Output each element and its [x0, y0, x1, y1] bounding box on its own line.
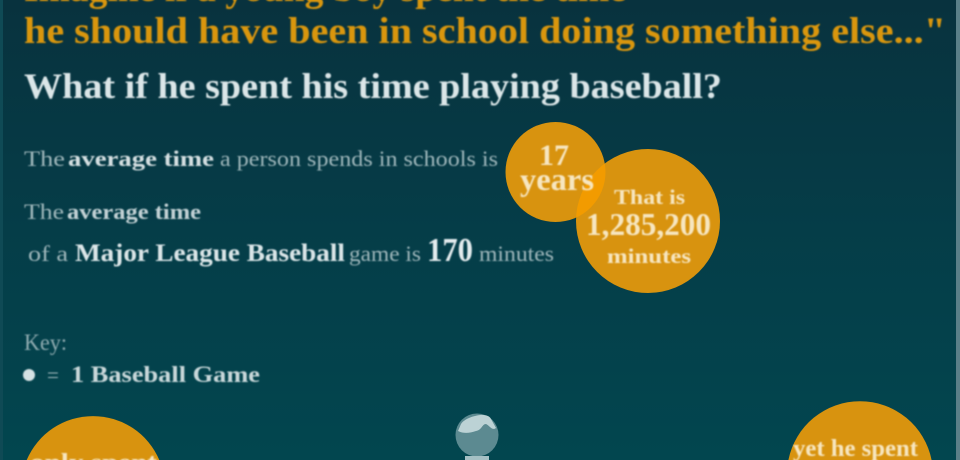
- text: average time in school: a person spends in schools is: [220, 146, 498, 171]
- text: average baseball game time: average time: [67, 199, 201, 224]
- figure: baseball player head: [456, 414, 498, 460]
- text: average time in school: The: [24, 146, 65, 171]
- icon: baseball game dot: [23, 369, 35, 381]
- circle label: that is 1,285,200 minutes: 1,285,200: [586, 206, 711, 242]
- question heading: What if he spent his time playing baseball?: [24, 66, 722, 106]
- circle label: that is 1,285,200 minutes: [586, 185, 711, 268]
- key: =: [47, 363, 59, 387]
- circle label: that is 1,285,200 minutes: minutes: [607, 244, 691, 268]
- text: average baseball game time: [24, 199, 554, 269]
- key: Key:: [24, 330, 67, 355]
- text: average baseball game time: minutes: [479, 241, 554, 266]
- text: average baseball game time: 170: [427, 232, 473, 269]
- text: average baseball game time: The: [24, 199, 64, 224]
- circle label: that is 1,285,200 minutes: That is: [614, 185, 685, 209]
- circle: bottom left: [27, 416, 159, 460]
- circle label: 17 years: [520, 139, 594, 197]
- text: average time in school: [24, 146, 498, 171]
- circle: bottom right: [788, 401, 932, 460]
- circle label: 17 years: 17: [539, 139, 569, 172]
- text: average time in school: average time: [68, 146, 214, 171]
- key: 1 Baseball Game: [71, 362, 260, 387]
- circle label: 17 years: years: [520, 161, 594, 197]
- text: average baseball game time: Major League Baseball: [75, 240, 345, 267]
- text: average baseball game time: of a: [28, 241, 68, 266]
- quote heading: he should have been in school doing something else...": [24, 11, 946, 52]
- circle: 17 years: [506, 122, 606, 222]
- circle: 1,285,200 minutes: [576, 149, 720, 293]
- key: [23, 330, 260, 387]
- text: average baseball game time: game is: [349, 241, 421, 266]
